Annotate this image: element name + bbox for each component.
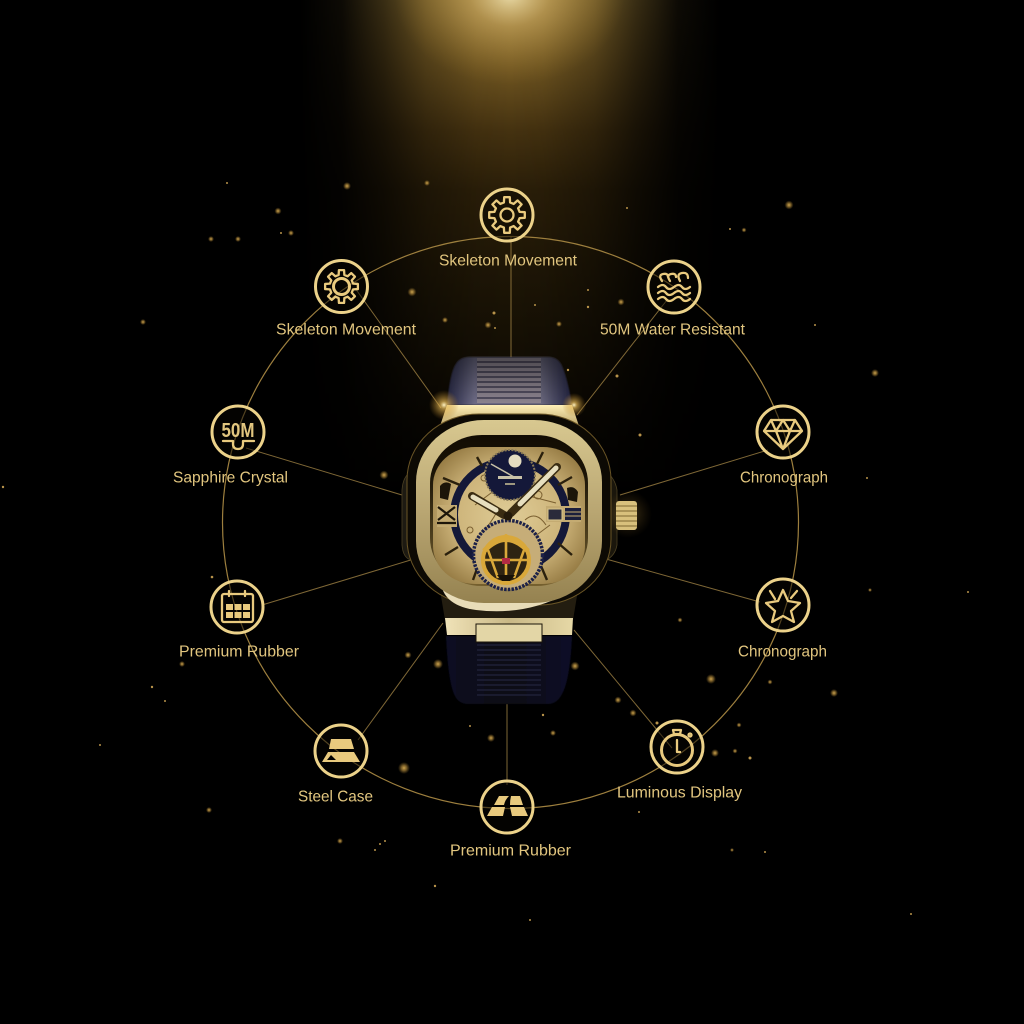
inner bezel edge: [430, 435, 588, 586]
node: 50M Water Resistant: [600, 261, 746, 338]
fine particles: [2, 182, 969, 921]
outer dark case: [407, 414, 611, 605]
dark cut-outs: [440, 482, 578, 502]
bottom strap: [446, 636, 572, 704]
label: Sapphire Crystal: [173, 470, 288, 486]
node: Luminous Display: [617, 721, 742, 802]
crown: [604, 490, 652, 538]
lug flares: [429, 390, 586, 420]
icon: 50M depth: 50M: [222, 420, 254, 442]
icon: gold bars: [487, 796, 528, 816]
top strap: [447, 357, 572, 405]
roman numeral: [437, 505, 457, 527]
label: Skeleton Movement: [276, 322, 417, 338]
icon: diamond: [764, 420, 802, 449]
gold bezel: [416, 420, 602, 603]
icon: waves: [658, 273, 690, 301]
watch hands: [472, 467, 557, 520]
node: Steel Case: [298, 725, 373, 806]
node: bottom Premium Rubber: [450, 781, 572, 860]
icon: gold bar: [322, 739, 360, 762]
lower crescent: [441, 584, 566, 611]
moon subdial: [485, 450, 535, 500]
node: lower Chronograph: [738, 579, 827, 660]
label: Chronograph: [738, 644, 827, 660]
node: left Premium Rubber: [179, 581, 300, 660]
node: left Skeleton Movement: [276, 260, 417, 338]
skeleton dial: [433, 447, 585, 590]
label: Premium Rubber: [450, 842, 572, 860]
navy chapter ring: [454, 461, 566, 569]
case side pusher left: [402, 472, 411, 560]
label: Skeleton Movement: [439, 252, 578, 270]
icon: cog: [325, 270, 358, 303]
light beam: [326, 0, 694, 418]
icon: stopwatch: [662, 730, 692, 766]
tourbillon: [474, 520, 542, 590]
node: Sapphire Crystal: [173, 406, 288, 486]
node: upper Chronograph: [740, 406, 828, 486]
gold particles: [140, 180, 879, 852]
top lug: [438, 405, 581, 432]
label: 50M Water Resistant: [600, 322, 746, 338]
hour markers: [443, 452, 572, 580]
icon: star: [766, 590, 800, 622]
bottom lug and link: [440, 590, 578, 642]
watch: [402, 357, 652, 704]
icon: gear: [489, 197, 525, 233]
icon: calendar: [222, 591, 253, 622]
orbit ring: [222, 236, 798, 808]
movement details: [467, 475, 556, 540]
label: Luminous Display: [617, 784, 742, 802]
case side pusher right: [606, 472, 617, 560]
label: Chronograph: [740, 470, 828, 486]
node: top Skeleton Movement: [439, 189, 578, 270]
label: Premium Rubber: [179, 644, 300, 660]
connector lines: [246, 237, 768, 785]
label: Steel Case: [298, 788, 373, 806]
date window: [546, 506, 581, 522]
